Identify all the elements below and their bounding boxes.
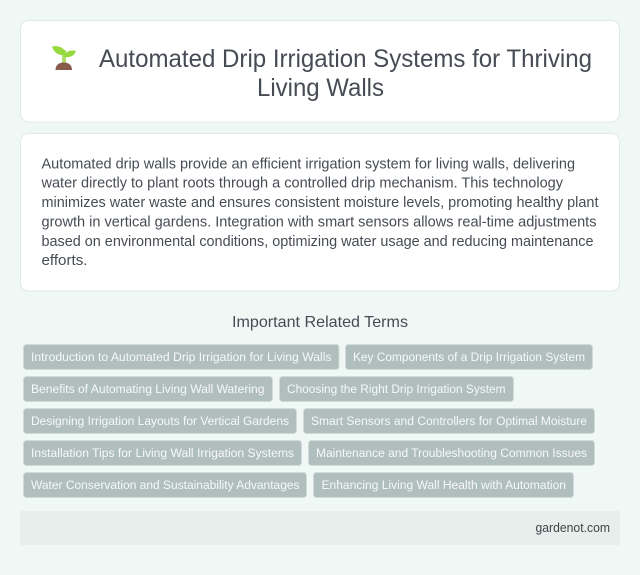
tag: key components bbox=[346, 344, 592, 370]
icon: seedling bbox=[52, 46, 76, 70]
footer: source: gardenot.com bbox=[536, 521, 610, 535]
text block: description paragraph: Automated drip walls provide an efficient irrigation system for living walls, delivering bbox=[42, 156, 575, 172]
tag: benefits: Benefits of Automating Living Wall Watering bbox=[31, 382, 264, 396]
tag: designing: Designing Irrigation Layouts for Vertical Gardens bbox=[31, 414, 289, 428]
tag: water conservation: Water Conservation and Sustainability Advantages bbox=[31, 478, 300, 492]
tag: designing bbox=[24, 408, 296, 434]
tag: choosing bbox=[280, 376, 514, 402]
tag: smart sensors: Smart Sensors and Controllers for Optimal Moisture bbox=[311, 414, 587, 428]
heading: title: Automated Drip Irrigation Systems for Thriving bbox=[99, 45, 592, 73]
text block: description paragraph: minimizes water waste and ensures consistent moisture levels, promoting healthy plant bbox=[42, 195, 598, 211]
tag: choosing: Choosing the Right Drip Irrigation System bbox=[287, 382, 506, 396]
text block: description paragraph: water directly to plant roots through a controlled drip mechanism. This technology bbox=[40, 176, 564, 192]
tag: installation bbox=[24, 440, 302, 466]
tag: introduction bbox=[24, 344, 339, 370]
tag: water conservation bbox=[24, 472, 306, 498]
panel: related term tags bbox=[24, 344, 594, 498]
tag: smart sensors bbox=[304, 408, 594, 434]
heading: title: Living Walls bbox=[257, 74, 384, 102]
text block: description paragraph: growth in vertical gardens. Integration with smart sensors allows real-time adjustments bbox=[42, 214, 596, 230]
text block: description paragraph bbox=[40, 156, 598, 269]
tag: introduction: Introduction to Automated Drip Irrigation for Living Walls bbox=[31, 350, 332, 364]
text block: description paragraph: efforts. bbox=[42, 253, 88, 269]
tag: enhancing: Enhancing Living Wall Health with Automation bbox=[322, 478, 566, 492]
tag: installation: Installation Tips for Living Wall Irrigation Systems bbox=[31, 446, 294, 460]
tag: enhancing bbox=[314, 472, 574, 498]
tag: key components: Key Components of a Drip Irrigation System bbox=[353, 350, 585, 364]
panel: title card bbox=[20, 20, 620, 122]
heading: title bbox=[99, 45, 592, 102]
footer bar bbox=[20, 511, 620, 545]
text block: description paragraph: based on environmental conditions, optimizing water usage and reducing maintenance bbox=[42, 234, 594, 250]
panel: description bbox=[20, 134, 620, 291]
heading: important related terms: Important Related Terms bbox=[232, 314, 408, 331]
tag: benefits bbox=[24, 376, 272, 402]
tag: maintenance bbox=[308, 440, 594, 466]
tag: maintenance: Maintenance and Troubleshooting Common Issues bbox=[316, 446, 587, 460]
